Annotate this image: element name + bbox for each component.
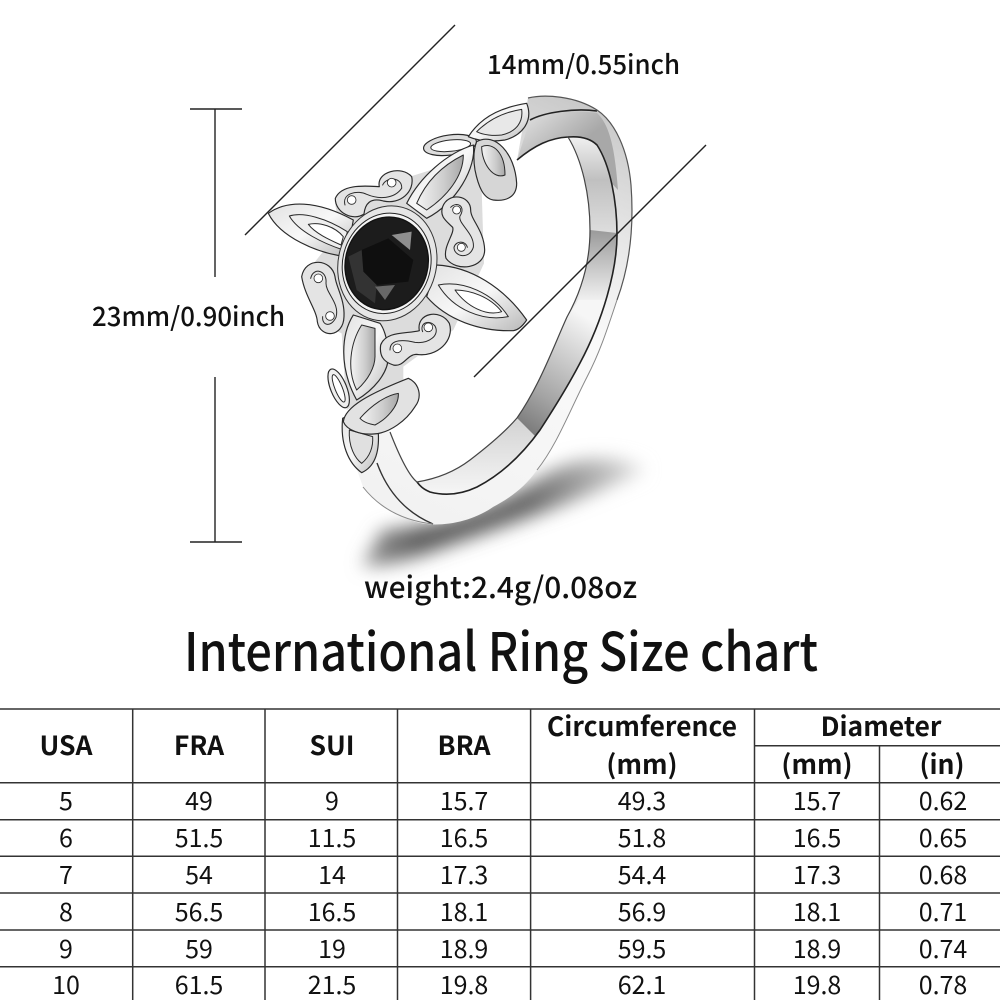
table header: SUI: [309, 724, 355, 763]
table header: USA: [39, 724, 94, 763]
silver backing: [303, 157, 484, 410]
table rows: 18.9: [793, 930, 841, 966]
table rows: 6: [59, 819, 73, 855]
top knot: [422, 103, 529, 200]
table rows: 0.68: [919, 856, 967, 892]
table rows: 0.65: [919, 819, 967, 855]
table rows: 16.5: [440, 819, 488, 855]
table rows: 54.4: [618, 856, 666, 892]
table header: Diameter: [821, 705, 942, 744]
table rows: 18.1: [793, 893, 841, 929]
right scroll: [442, 197, 485, 267]
table rows: 56.5: [175, 893, 223, 929]
flower and knots, scaled drawing group: [268, 103, 529, 473]
title: International Ring Size chart: [184, 611, 818, 687]
scrollwork: [302, 171, 485, 365]
table rows: 18.9: [440, 930, 488, 966]
ring illustration: [268, 96, 645, 566]
label: weight: weight:2.4g/0.08oz: [364, 565, 637, 607]
table rows: 19: [318, 930, 346, 966]
table rows: 7: [59, 856, 73, 892]
top scroll: [335, 171, 412, 217]
ring band: [357, 96, 632, 524]
label: width: 14mm/0.55inch: [487, 43, 680, 82]
table rows: 51.8: [618, 819, 666, 855]
table rows: 14: [318, 856, 346, 892]
bottom petal: [344, 315, 388, 400]
table rows: 51.5: [175, 819, 223, 855]
table rows: 17.3: [440, 856, 488, 892]
label: height: 23mm/0.90inch: [92, 295, 285, 334]
table header: BRA: [438, 724, 491, 763]
table rows: 59: [185, 930, 213, 966]
table rows: 5: [59, 782, 73, 818]
height dimension line: [190, 109, 242, 542]
petals: [268, 145, 527, 400]
width dimension line: [245, 25, 706, 377]
table header: FRA: [174, 724, 225, 763]
table rows: 15.7: [440, 782, 488, 818]
table rows: 0.74: [919, 930, 967, 966]
table rows: 49: [185, 782, 213, 818]
size chart table: [0, 705, 1000, 1000]
table header: [39, 705, 965, 782]
ring shadow: [362, 459, 645, 566]
table rows: 18.1: [440, 893, 488, 929]
table header: (in): [919, 743, 965, 782]
table header: Circumference: [547, 705, 737, 744]
table rows: 8: [59, 893, 73, 929]
left scroll: [302, 262, 344, 334]
table rows: 0.62: [919, 782, 967, 818]
table rows: 56.9: [618, 893, 666, 929]
table rows: 9: [325, 782, 339, 818]
table rows: 15.7: [793, 782, 841, 818]
table rows: 59.5: [618, 930, 666, 966]
bottom scroll: [380, 314, 450, 365]
bezel and black stone: [325, 195, 450, 332]
table grid: [0, 709, 1000, 1000]
table rows: [52, 782, 967, 1000]
table header: (mm): [606, 743, 678, 782]
right petal: [427, 265, 527, 331]
table header: (mm): [781, 743, 853, 782]
table rows: 11.5: [308, 819, 356, 855]
table rows: 17.3: [793, 856, 841, 892]
table rows: 9: [59, 930, 73, 966]
left petal: [268, 204, 353, 257]
table rows: 16.5: [308, 893, 356, 929]
table rows: 0.71: [919, 893, 967, 929]
bottom knot: [324, 366, 419, 473]
top petal: [407, 145, 474, 218]
table rows: 54: [185, 856, 213, 892]
table rows: 16.5: [793, 819, 841, 855]
table rows: 49.3: [618, 782, 666, 818]
